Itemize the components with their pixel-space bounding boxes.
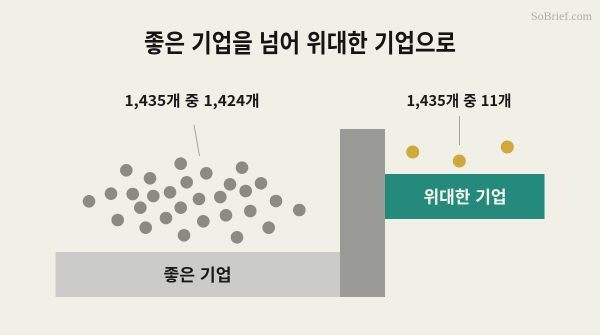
bar: great company (385, 174, 544, 219)
label: great company count: 1,435개 중 11개 (406, 90, 512, 111)
bar: good company (56, 252, 340, 297)
bar: good company: 좋은 기업 (164, 261, 232, 286)
pillar: barrier wall (340, 129, 385, 297)
leader line: good company count (194, 125, 200, 156)
gold dots: great companies (406, 140, 514, 168)
gray dots: good companies (83, 157, 306, 244)
leader line: great company count (458, 116, 460, 145)
watermark: SoBrief.com (531, 9, 593, 23)
bar: great company: 위대한 기업 (424, 183, 506, 208)
title: 좋은 기업을 넘어 위대한 기업으로 (144, 24, 456, 60)
label: good company count: 1,435개 중 1,424개 (124, 90, 260, 111)
